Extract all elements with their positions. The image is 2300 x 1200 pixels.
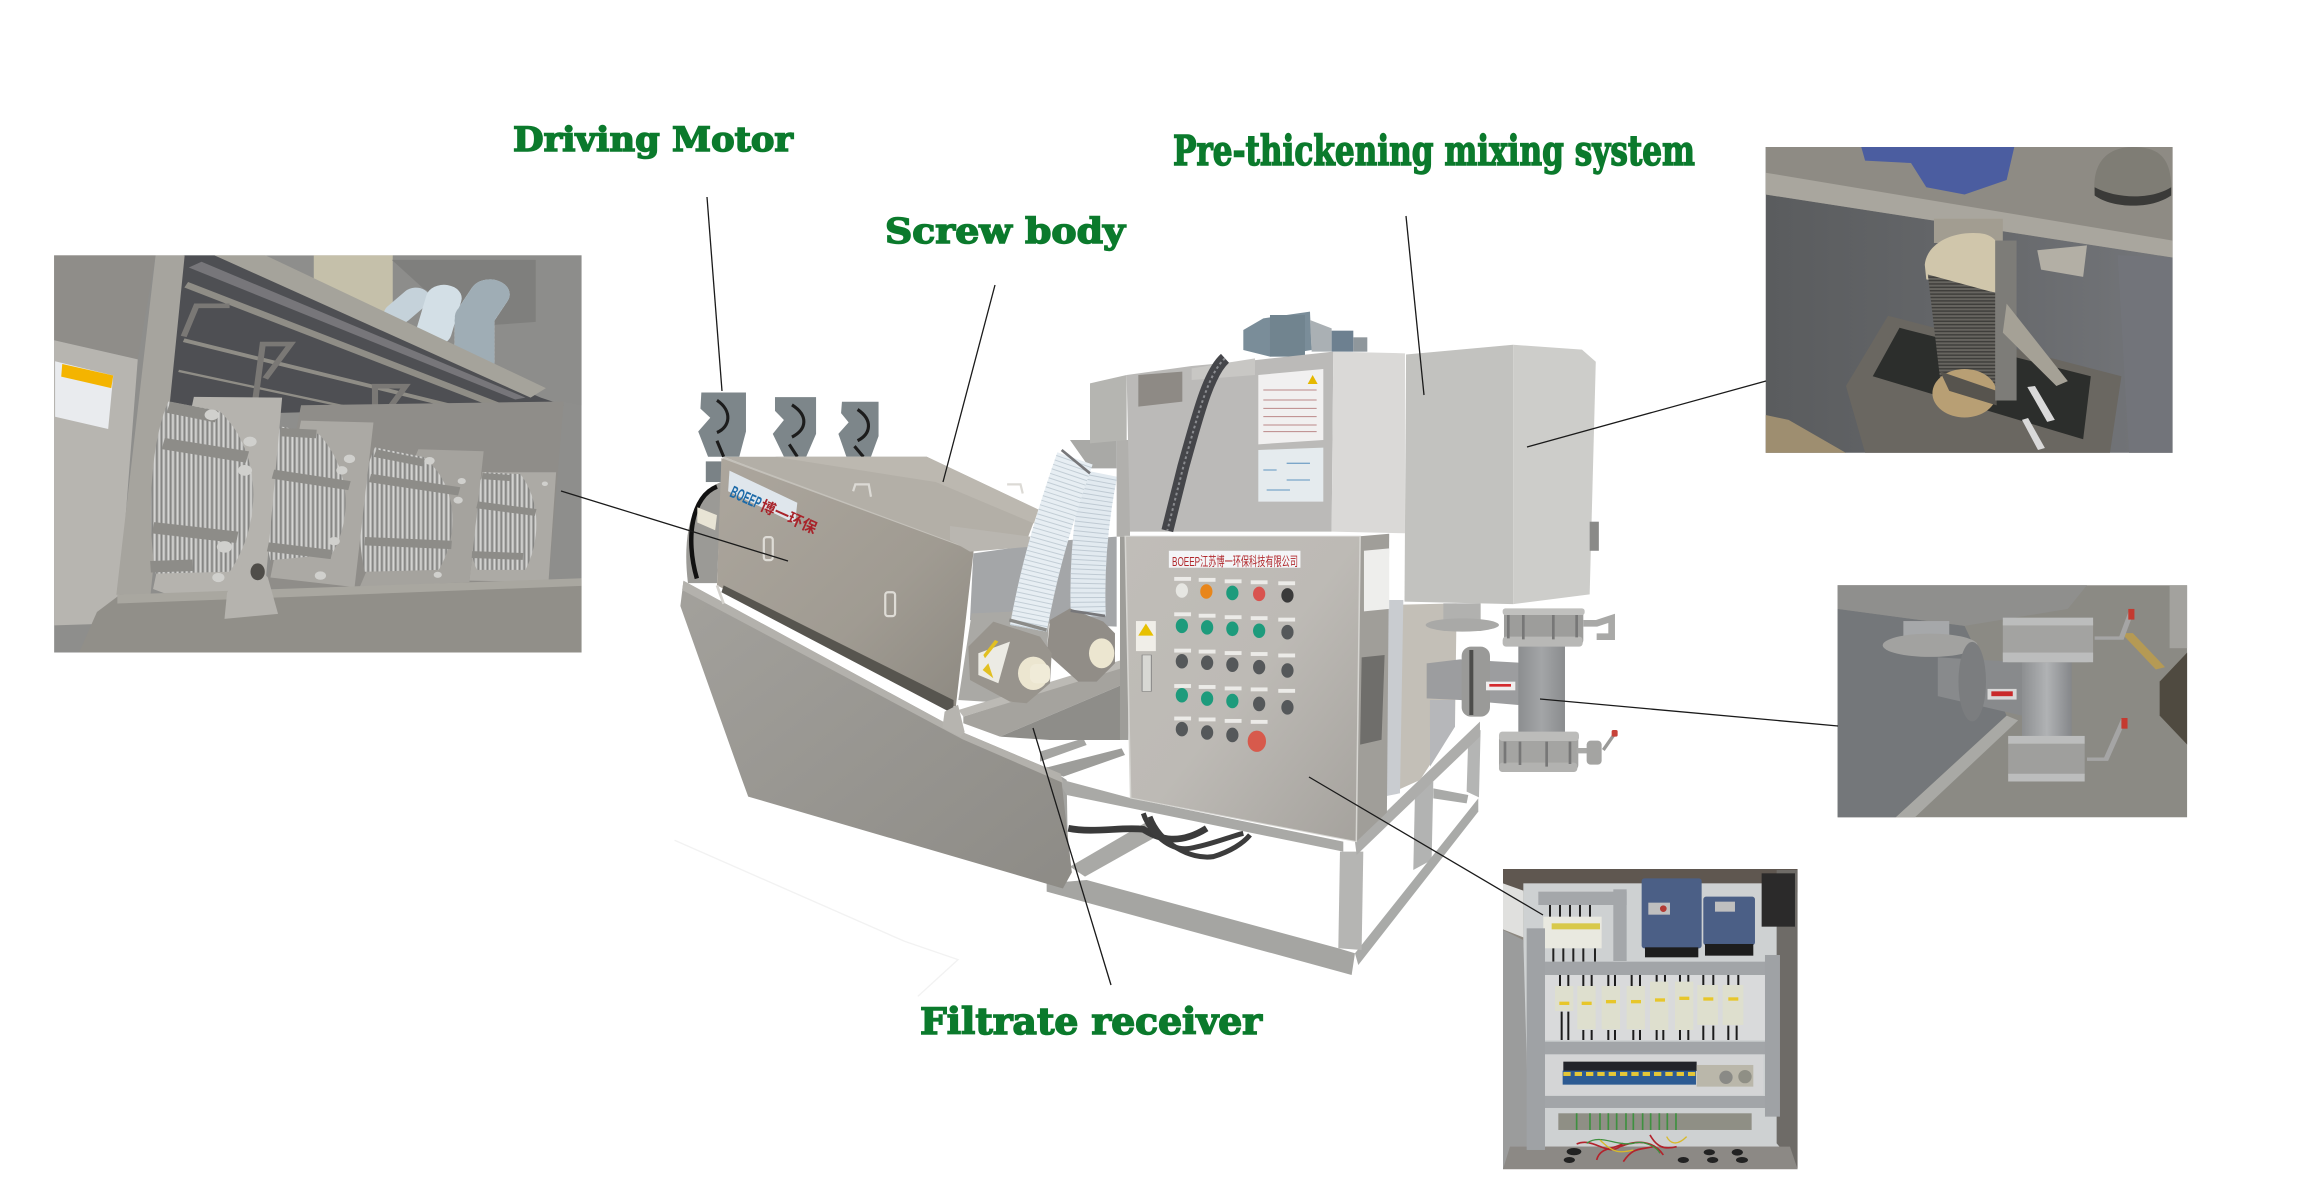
body, motors and base panel: [675, 393, 1072, 996]
mixing tank and control cabinet: [1405, 345, 1599, 604]
pump front: [968, 622, 1052, 703]
arrow: pre-thickening leader: [1406, 216, 1424, 395]
driving motors: [698, 393, 879, 457]
heading: Driving Motor: Driving Motor: [513, 120, 794, 160]
valve handles: [1583, 618, 1612, 637]
leader lines: [561, 197, 1838, 985]
vertical pipe: [1518, 645, 1565, 738]
control buttons: [1174, 577, 1295, 752]
company name text on cabinet: BOEEP江苏博一环保科技有限公司: [1172, 554, 1298, 569]
hose front: [1009, 450, 1105, 630]
arrow: cabinet leader: [1309, 777, 1543, 915]
warning label: [55, 361, 113, 429]
photo: screw body detail: [54, 255, 582, 653]
photo: control cabinet interior: [1503, 869, 1798, 1169]
logo text on body: BOEEP: [727, 482, 764, 513]
cables: [1068, 828, 1207, 839]
main machine: dewatering press: [675, 312, 1618, 996]
screw body front panel: [717, 458, 974, 707]
arrow: mixing interior leader: [1527, 381, 1766, 447]
hose back: [1088, 473, 1100, 617]
arrow: screw detail leader: [561, 491, 788, 561]
control cabinet: [1125, 534, 1389, 842]
instruction labels: [1258, 369, 1323, 444]
arrow: screw body leader: [943, 285, 995, 482]
arrow: driving motor leader: [707, 197, 722, 391]
heading: Filtrate receiver: Filtrate receiver: [920, 1001, 1263, 1043]
photo: mixing system interior: [1766, 147, 2173, 453]
cable: [1167, 358, 1225, 531]
heading: Screw body: Screw body: [885, 211, 1127, 252]
body cover: [724, 457, 1038, 550]
arrow: valves leader: [1540, 699, 1838, 726]
horizontal pipe: [1427, 659, 1530, 705]
logo text on body: 博一环保: [757, 497, 820, 538]
logo plate: [728, 471, 797, 523]
pump rear: [1047, 608, 1115, 682]
filtrate tray: [963, 667, 1122, 737]
din rails: [1538, 892, 1627, 905]
mixing tank: [1405, 345, 1513, 604]
company label: [1169, 551, 1300, 568]
relays: [1563, 1062, 1697, 1071]
photo: discharge valves detail: [1838, 585, 2187, 817]
top-left pipe stub: [1443, 603, 1481, 622]
lower flange: [1499, 735, 1578, 770]
arrow: filtrate receiver leader: [1033, 728, 1111, 985]
hoses: [398, 294, 490, 363]
rear tank and pipes: [1383, 600, 1618, 797]
heading: Pre-thickening mixing system: Pre-thickening mixing system: [1173, 127, 1695, 175]
nameplate: [1138, 372, 1182, 407]
inverters: [1642, 878, 1702, 948]
control cabinet front: [1125, 536, 1360, 842]
top motor: [1243, 312, 1367, 357]
breakers: [1543, 917, 1602, 948]
contactors: [1555, 982, 1743, 1030]
upper box with motor: [1090, 312, 1405, 533]
hoses, pumps and filtrate tray: [950, 440, 1130, 740]
round end and cable: [686, 482, 721, 583]
warning sign and sight glass: [1136, 621, 1156, 651]
upper flange: [1504, 610, 1583, 645]
terminal strip: [1558, 1113, 1752, 1130]
logo text on body: [727, 482, 820, 538]
stand frame: [1040, 722, 1481, 975]
plates and screws: [469, 472, 556, 582]
control cabinet side: [1356, 534, 1389, 842]
base panel: [680, 581, 1072, 888]
upper box edge: [1117, 440, 1130, 537]
